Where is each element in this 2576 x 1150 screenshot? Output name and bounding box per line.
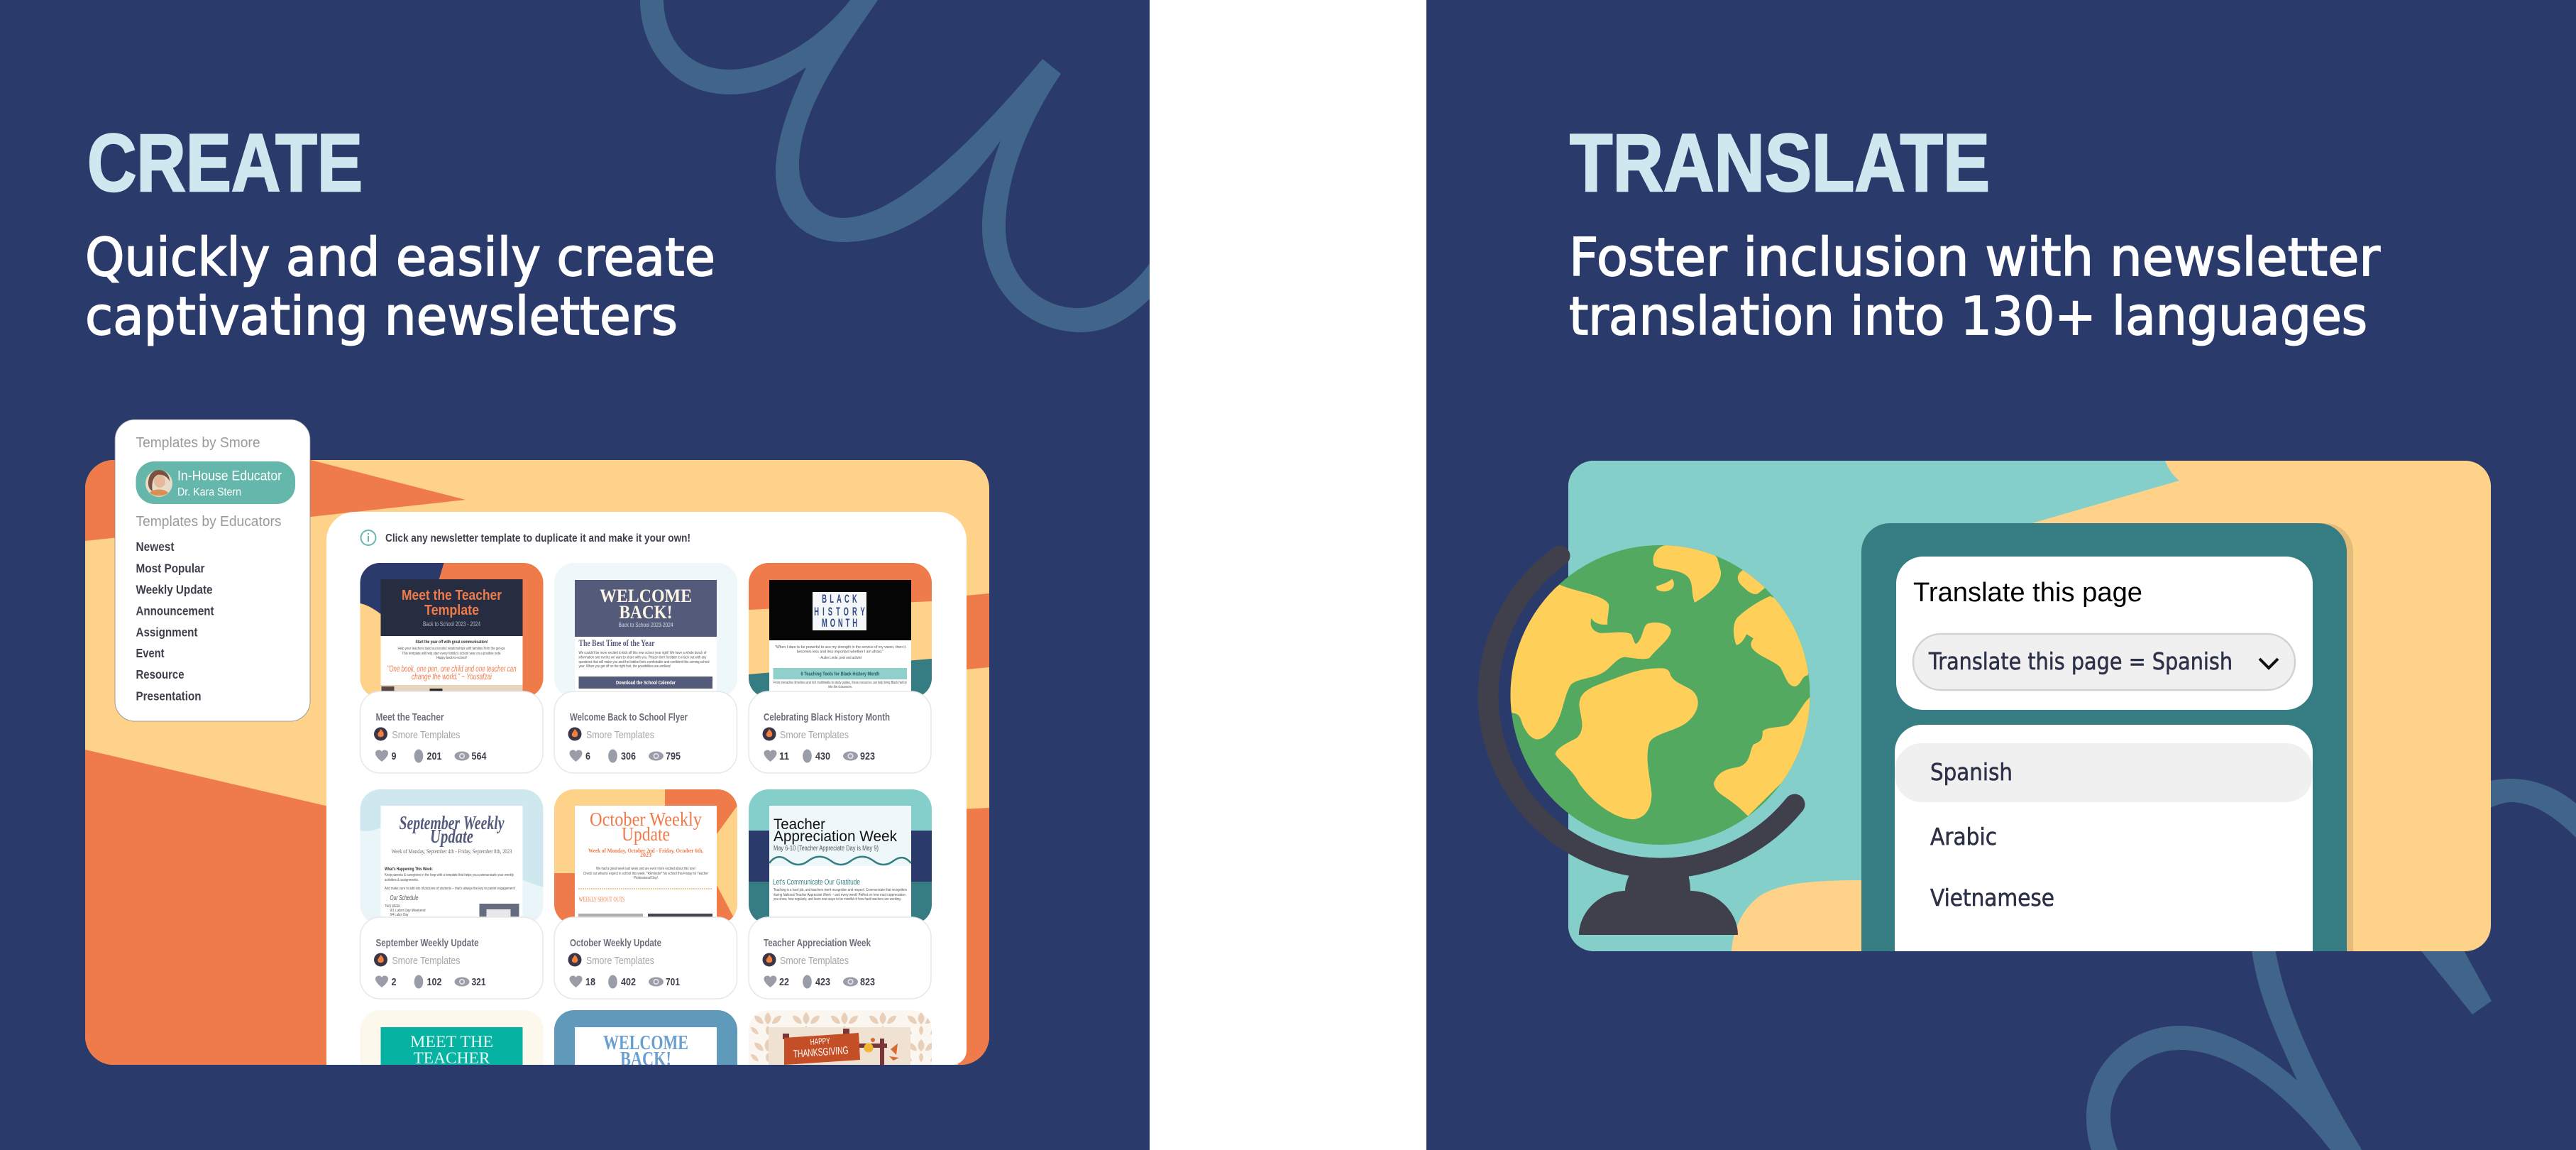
subheading: translate: translation into 130+ languages: [1569, 286, 2367, 347]
sidebar: template categories: Templates by Educators: [136, 514, 281, 530]
template card: Welcome Back to School Flyer: Download the School Calendar: [616, 681, 676, 686]
template card: Celebrating Black History Month: [749, 563, 932, 773]
template card: Celebrating Black History Month: 6 Teaching Tools for Black History Month: [800, 672, 880, 677]
template card: Welcome Back to School Flyer: BACK!: [619, 602, 673, 623]
template thumbnail: Welcome Back blue: BACK!: [620, 1048, 671, 1070]
template thumbnail: Meet the Teacher teal: TEACHER: [413, 1049, 490, 1067]
template card: Celebrating Black History Month: 11: [779, 750, 789, 762]
template card: Celebrating Black History Month: 430: [815, 750, 830, 762]
template card: October Weekly Update: 2023: [640, 852, 651, 858]
template card: Welcome Back to School Flyer: WELCOME: [600, 586, 692, 606]
template card: Meet the Teacher: Back to School 2023 - 2024: [423, 620, 480, 628]
template card: October Weekly Update: Update: [622, 823, 670, 845]
template card: Welcome Back to School Flyer: information and events we want to share with you. Please don't hesitate to reach out with any: [579, 656, 707, 660]
info row: [360, 530, 690, 545]
template card: September Weekly Update: And make sure to add lots of pictures of students -- that's always the key to parent engagement!: [385, 887, 515, 891]
teal shape: [1568, 461, 2179, 951]
template card: Meet the Teacher: Happy back-to-school!: [436, 656, 467, 660]
template card: Celebrating Black History Month: HISTORY: [814, 605, 865, 618]
template card: October Weekly Update: October Weekly: [590, 809, 702, 830]
template card: Teacher Appreciation Week: 22: [779, 976, 789, 988]
template card: Meet the Teacher: Template: [424, 603, 479, 618]
template card: September Weekly Update: 102: [427, 976, 441, 988]
template card: Teacher Appreciation Week: Teacher Appreciation Week: [764, 937, 871, 949]
template card: Teacher Appreciation Week: Teaching is a hard job, and teachers merit recognition and respect. Communicate that recognition: [774, 888, 907, 892]
language selector card: [1896, 557, 2313, 710]
template card: Meet the Teacher: 9: [392, 750, 396, 762]
template card: Celebrating Black History Month: Smore Templates: [780, 729, 849, 741]
panel: create: [85, 460, 989, 1095]
template card: Welcome Back to School Flyer: Back to School 2023-2024: [619, 621, 673, 628]
sidebar: template categories: Announcement: [136, 603, 214, 618]
template card: Meet the Teacher: Meet the Teacher: [376, 711, 444, 723]
template card: Meet the Teacher: 201: [427, 750, 441, 762]
template card: Meet the Teacher: Start the year off with great communication!: [416, 640, 488, 645]
template card: Celebrating Black History Month: becomes less and less important whether I am afraid.": [797, 650, 884, 655]
decorative scribble: bottom right panel: [2086, 779, 2576, 1150]
template card: October Weekly Update: 701: [666, 976, 680, 988]
template card: Welcome Back to School Flyer: The Best Time of the Year: [579, 638, 655, 648]
template card: Celebrating Black History Month: - Audre Lorde, poet and activist: [819, 656, 862, 660]
template card: Teacher Appreciation Week: during National Teacher Appreciate Week -- and every week! Reflect on how much appreciation: [774, 893, 906, 897]
template card: September Weekly Update: 9/1 Labor Day Weekend: [390, 909, 426, 913]
template card: Welcome Back to School Flyer: Welcome Back to School Flyer: [570, 711, 688, 723]
teal pill: In-House Educator: [136, 461, 295, 504]
template card: Teacher Appreciation Week: Let's Communicate Our Gratitude: [773, 878, 860, 887]
template card: Meet the Teacher: Help your teachers build successful relationships with families from the get-go.: [397, 647, 506, 651]
template card: Welcome Back to School Flyer: 306: [621, 750, 636, 762]
template card: September Weekly Update: Week of Monday, September 4th - Friday, September 8th, 2023: [392, 848, 512, 855]
template thumbnail: Meet the Teacher teal: MEET THE: [410, 1033, 493, 1051]
template card: Teacher Appreciation Week: 423: [815, 976, 830, 988]
white centre divider: [1150, 0, 1426, 1150]
language selector card: Translate this page = Spanish: [1928, 647, 2233, 675]
heading: CREATE: CREATE: [87, 118, 363, 209]
translate dialog: [1861, 523, 2347, 951]
panel background: [85, 460, 989, 1065]
template card: Welcome Back to School Flyer: Smore Templates: [586, 729, 654, 741]
template card: Celebrating Black History Month: Celebrating Black History Month: [764, 711, 890, 723]
template card: Meet the Teacher: "One book, one pen, one child and one teacher can: [387, 664, 517, 674]
template thumbnail: Welcome Back blue: WELCOME: [603, 1031, 688, 1054]
template card: October Weekly Update: 18: [585, 976, 595, 988]
template card: September Weekly Update: Keep parents & caregivers in the loop with a template that helps you communicate your weekly: [385, 873, 514, 877]
template card: September Weekly Update: activities & assignments.: [385, 878, 419, 882]
teal pill: In-House Educator: In-House Educator: [177, 469, 282, 484]
template card: Celebrating Black History Month: into the classroom.: [828, 685, 852, 689]
template card: September Weekly Update: September Weekly Update: [376, 937, 478, 949]
template card: Teacher Appreciation Week: 823: [860, 976, 875, 988]
template card: Welcome Back to School Flyer: questions that will make you and the kiddos feels comfortable and confident this coming school: [579, 660, 710, 664]
globe stand base: [1579, 870, 1738, 935]
template card: September Weekly Update: [360, 789, 544, 999]
template card: October Weekly Update: October Weekly Update: [570, 937, 661, 949]
template thumbnail: Happy Thanksgiving: [749, 1010, 932, 1065]
template thumbnail: Welcome Back blue: [554, 1010, 737, 1065]
template card: Teacher Appreciation Week: Appreciation Week: [774, 828, 897, 845]
sidebar: template categories: Resource: [136, 667, 185, 681]
template card: September Weekly Update: What's Happening This Week:: [385, 867, 433, 872]
teal pill: In-House Educator: Dr. Kara Stern: [177, 486, 241, 498]
sidebar: template categories: Templates by Smore: [136, 435, 260, 451]
card shadow: [2321, 523, 2353, 951]
template card: Celebrating Black History Month: From interactive timelines and rich multimedia to study guides, these resources can help bring Black history: [774, 681, 907, 685]
template card: October Weekly Update: 402: [621, 976, 636, 988]
template card: October Weekly Update: Professional Day!: [634, 876, 658, 880]
globe sphere: [1510, 545, 1810, 845]
template card: September Weekly Update: Smore Templates: [392, 955, 460, 967]
template card: Teacher Appreciation Week: Teacher: [774, 816, 825, 833]
icon: globe: [1488, 539, 1817, 935]
template card: September Weekly Update: September Weekly: [399, 812, 505, 833]
subheading: create: [85, 227, 715, 347]
subheading: create: captivating newsletters: [85, 286, 678, 347]
globe land: [1500, 539, 1817, 819]
subheading: translate: [1569, 227, 2381, 347]
language selector card: Translate this page: [1913, 578, 2142, 608]
white template browser: [326, 512, 967, 1065]
sidebar: template categories: Newest: [136, 540, 175, 554]
subheading: translate: Foster inclusion with newsletter: [1569, 227, 2381, 288]
language list card: Arabic: [1930, 823, 1997, 850]
template card: Meet the Teacher: 564: [471, 750, 487, 762]
orange top-left shape: [85, 460, 466, 541]
template card: Celebrating Black History Month: "When I dare to be powerful to use my strength in the service of my vision, then it: [775, 645, 906, 650]
template card: Welcome Back to School Flyer: 795: [666, 750, 681, 762]
panel: translate: [1568, 461, 2491, 951]
sidebar: template categories: Assignment: [136, 625, 198, 639]
template card: Welcome Back to School Flyer: [554, 563, 737, 773]
icon: chevron: [2259, 659, 2278, 668]
template card: Meet the Teacher: change the world." ~ Yousafzai: [412, 672, 492, 681]
template card: Teacher Appreciation Week: [749, 789, 932, 999]
template card: September Weekly Update: 9/4 Labor Day: [390, 913, 409, 917]
template card: Teacher Appreciation Week: you show, how regularly, and learn new ways to be mindful of how hard teachers are working.: [774, 897, 901, 902]
sidebar: template categories: Presentation: [136, 689, 202, 703]
template card: Welcome Back to School Flyer: We couldn't be more excited to kick off this new school year right! We have a whole bunch of: [579, 651, 707, 655]
info row: Click any newsletter template to duplicate it and make it your own!: [385, 532, 690, 544]
template thumbnail: Meet the Teacher teal: [360, 1010, 544, 1065]
template card: October Weekly Update: Week of Monday, October 2nd - Friday, October 6th,: [588, 848, 703, 854]
template thumbnail: Happy Thanksgiving: THANKSGIVING: [793, 1044, 849, 1061]
template card: September Weekly Update: Update: [430, 826, 473, 847]
sidebar: template categories: [115, 420, 310, 721]
template card: Celebrating Black History Month: MONTH: [822, 616, 857, 630]
template card: October Weekly Update: [554, 789, 737, 999]
template card: Meet the Teacher: Meet the Teacher: [402, 588, 502, 603]
template card: Welcome Back to School Flyer: year. When you get off on the right foot, the possibilities are endless!: [579, 664, 671, 669]
language list card: Vietnamese: [1930, 884, 2054, 911]
template card: October Weekly Update: Smore Templates: [586, 955, 654, 967]
subheading: create: Quickly and easily create: [85, 227, 715, 288]
template card: Welcome Back to School Flyer: 6: [585, 750, 590, 762]
template card: Celebrating Black History Month: 923: [860, 750, 875, 762]
template card: Celebrating Black History Month: BLACK: [822, 592, 857, 606]
template card: October Weekly Update: We had a great week last week and are even more excited about this one!: [596, 867, 695, 871]
template card: September Weekly Update: Our Schedule: [390, 894, 419, 902]
template card: September Weekly Update: THIS WEEK: [385, 904, 400, 909]
template card: Teacher Appreciation Week: Smore Templates: [780, 955, 849, 967]
language list card: [1895, 725, 2313, 951]
sidebar: template categories: Event: [136, 646, 165, 660]
template card: October Weekly Update: Check out what to expect in school this week. *Reminder* No school this Friday for Teacher: [583, 872, 708, 876]
language list card: Spanish: [1930, 758, 2013, 786]
decorative scribble: top left panel: [640, 0, 1150, 332]
template card: Meet the Teacher: This template will help start every family's school year on a positive note.: [402, 652, 502, 656]
heading: TRANSLATE: TRANSLATE: [1570, 118, 1990, 209]
template card: Meet the Teacher: [360, 563, 544, 773]
template thumbnail: Happy Thanksgiving: HAPPY: [810, 1036, 830, 1047]
orange right shapes: [958, 593, 989, 1065]
orange bottom-left shape: [85, 750, 341, 1065]
sidebar: template categories: Most Popular: [136, 561, 205, 575]
panel background: [1568, 461, 2491, 951]
template card: September Weekly Update: 321: [471, 976, 485, 988]
template card: Meet the Teacher: Smore Templates: [392, 729, 460, 741]
globe stand arc: [1488, 556, 1795, 868]
template card: Teacher Appreciation Week: May 6-10 (Teacher Appreciate Day is May 9): [774, 845, 879, 853]
template card: September Weekly Update: 2: [392, 976, 396, 988]
template card: October Weekly Update: WEEKLY SHOUT OUTS: [579, 896, 624, 903]
sidebar: template categories: Weekly Update: [136, 582, 213, 596]
